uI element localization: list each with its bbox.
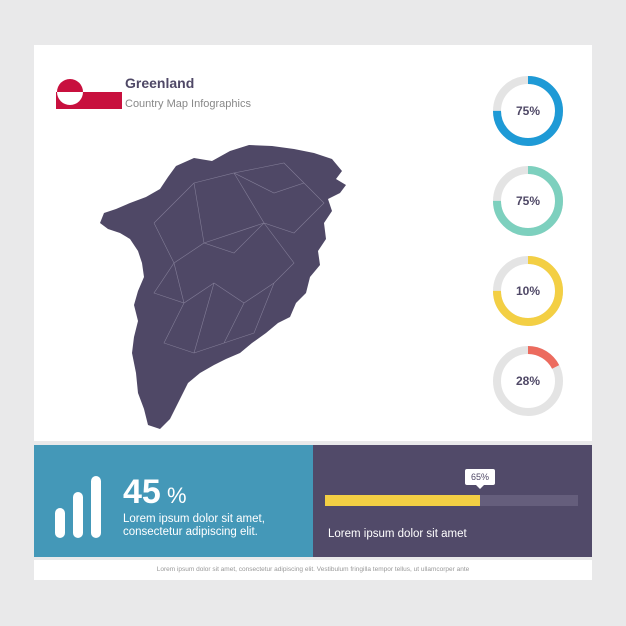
donut 3: 10% [516, 284, 540, 298]
footer text [34, 560, 592, 580]
donut 2: 75% [516, 194, 540, 208]
donut 4: 28% [516, 374, 540, 388]
map: Greenland [100, 145, 346, 429]
callout 65%: 65% [471, 472, 489, 482]
footer text: Lorem ipsum dolor sit amet, consectetur adipiscing elit. Vestibulum fringilla tempor tellus, ut ullamcorper ante [157, 566, 469, 573]
icon: bars [55, 476, 101, 538]
stat text [123, 513, 265, 538]
stat text: Lorem ipsum dolor sit amet, [123, 513, 265, 525]
callout 65% [465, 469, 495, 485]
donut 1 [493, 76, 563, 146]
stat text: consectetur adipiscing elit. [123, 526, 258, 538]
donut 2 [493, 166, 563, 236]
panel: progress [313, 445, 592, 557]
donut 1: 75% [516, 104, 540, 118]
donut 3 [493, 256, 563, 326]
panel: blue stat [34, 445, 313, 557]
stat 45%: 45 % [123, 473, 187, 511]
progress bar [325, 495, 578, 506]
donut 4 [493, 346, 563, 416]
flag [56, 79, 122, 109]
progress text: Lorem ipsum dolor sit amet [328, 528, 467, 540]
title: Greenland [125, 75, 194, 91]
main card [34, 45, 592, 441]
subtitle: Country Map Infographics [125, 98, 251, 110]
